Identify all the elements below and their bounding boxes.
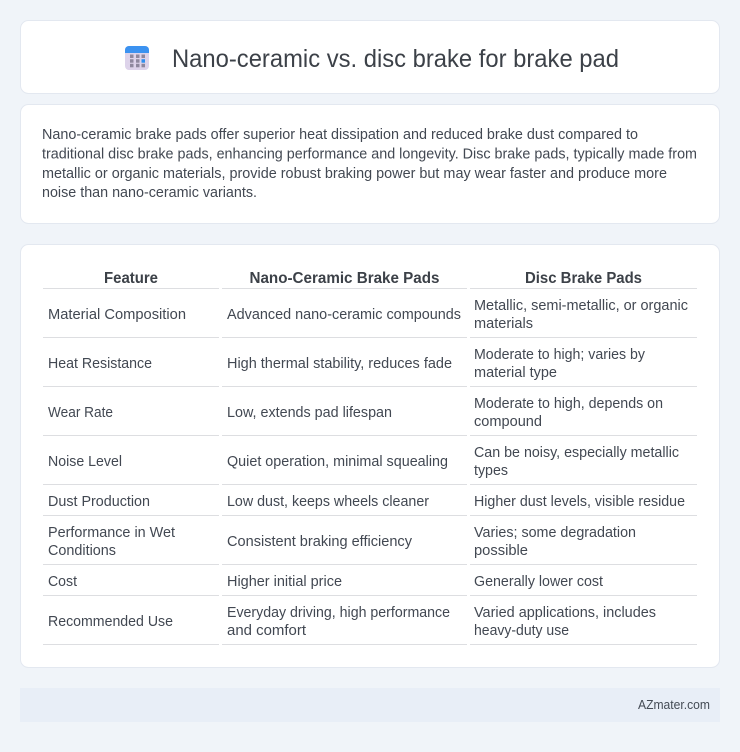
table header: Nano-Ceramic Brake Pads — [250, 270, 440, 287]
row: recommended use: Varied applications, includes — [474, 605, 656, 621]
row: recommended use: Recommended Use — [48, 614, 173, 630]
row: material composition: Material Composition — [48, 307, 186, 323]
row: recommended use: and comfort — [227, 623, 306, 639]
row: dust production: Higher dust levels, visible residue — [474, 494, 685, 510]
intro text — [42, 127, 697, 201]
row: performance in wet conditions — [48, 525, 636, 559]
row: recommended use: heavy-duty use — [474, 623, 569, 639]
title panel — [20, 20, 720, 94]
row: performance in wet conditions: Consistent braking efficiency — [227, 534, 413, 550]
table header — [104, 270, 642, 287]
row: cost — [48, 574, 603, 590]
row: dust production: Low dust, keeps wheels cleaner — [227, 494, 429, 510]
row: noise level: Can be noisy, especially metallic — [474, 445, 679, 461]
row lines — [43, 288, 697, 644]
footer bar — [20, 688, 720, 722]
row: wear rate: Moderate to high, depends on — [474, 396, 663, 412]
intro text: Nano-ceramic brake pads offer superior heat dissipation and reduced brake dust compared to — [42, 127, 638, 143]
row: heat resistance: Moderate to high; varies by — [474, 347, 646, 363]
row: heat resistance: High thermal stability, reduces fade — [227, 356, 452, 372]
row: wear rate: compound — [474, 414, 542, 430]
intro text: metallic or organic materials, provide robust braking power but may wear faster and produce more — [42, 166, 667, 182]
row: wear rate: Low, extends pad lifespan — [227, 405, 392, 421]
row: performance in wet conditions: Performance in Wet — [48, 525, 175, 541]
intro text: traditional disc brake pads, enhancing performance and longevity. Disc brake pads, typically made from — [42, 146, 697, 162]
row: performance in wet conditions: Conditions — [48, 543, 116, 559]
row: dust production: Dust Production — [48, 494, 150, 510]
row: dust production — [48, 494, 685, 510]
row: noise level: types — [474, 463, 508, 479]
panel: comparison table — [20, 244, 720, 668]
row: cost: Generally lower cost — [474, 574, 603, 590]
row: heat resistance: Heat Resistance — [48, 356, 152, 372]
icon: calendar — [125, 46, 149, 70]
row: noise level — [48, 445, 679, 479]
footer credit: AZmater.com — [638, 698, 710, 712]
table header: Feature — [104, 270, 158, 287]
row: cost: Cost — [48, 574, 77, 590]
row: cost: Higher initial price — [227, 574, 342, 590]
row: performance in wet conditions: possible — [474, 543, 528, 559]
row: heat resistance: material type — [474, 365, 557, 381]
table header: Disc Brake Pads — [525, 270, 642, 287]
row: performance in wet conditions: Varies; some degradation — [474, 525, 636, 541]
row: heat resistance — [48, 347, 646, 381]
row: wear rate — [48, 396, 663, 430]
row: material composition — [48, 298, 688, 332]
row: recommended use — [48, 605, 656, 639]
row: material composition: Metallic, semi-metallic, or organic — [474, 298, 688, 314]
panel: introduction — [20, 104, 720, 224]
intro text: noise than nano-ceramic variants. — [42, 185, 257, 201]
row: material composition: Advanced nano-ceramic compounds — [227, 307, 461, 323]
row: wear rate: Wear Rate — [48, 405, 113, 421]
title: Nano-ceramic vs. disc brake for brake pad — [172, 45, 619, 73]
row: noise level: Noise Level — [48, 454, 122, 470]
row: recommended use: Everyday driving, high performance — [227, 605, 450, 621]
row: noise level: Quiet operation, minimal squealing — [227, 454, 448, 470]
row: material composition: materials — [474, 316, 533, 332]
